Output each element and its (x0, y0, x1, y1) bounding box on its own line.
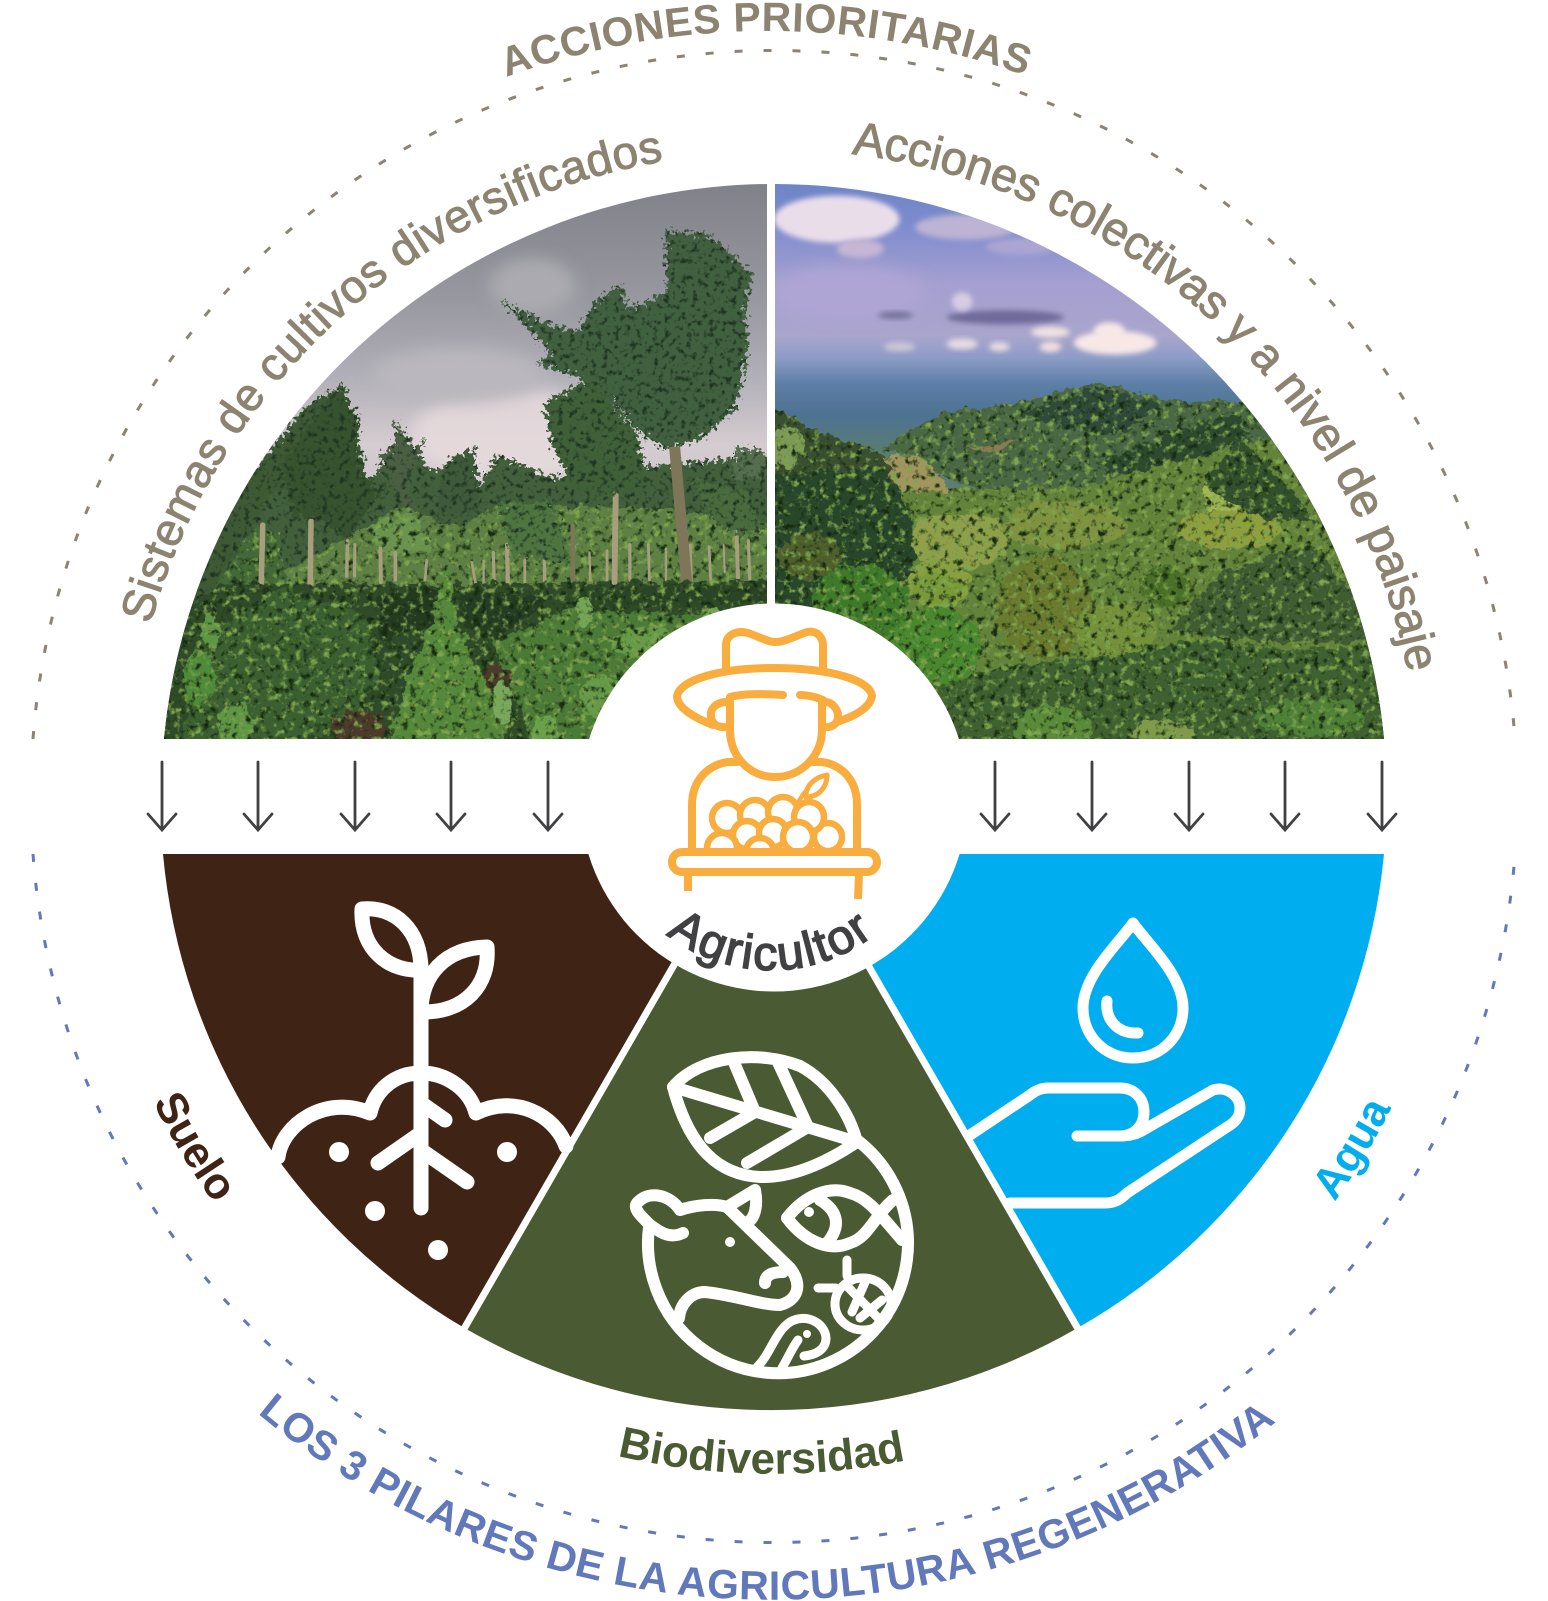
pillar sector: biodiversity (464, 797, 1078, 1410)
arrows: from actions to pillars (right) (981, 762, 1396, 830)
label: Agua: Agua (1316, 1102, 1392, 1202)
label: Biodiversidad: Biodiversidad (620, 1427, 904, 1474)
pillar sector: soil (163, 797, 771, 1328)
icon: farmer with fruit (672, 632, 877, 899)
icon: water drop over hand (970, 923, 1240, 1203)
label: Acciones colectivas y a nivel de paisaje: Acciones colectivas y a nivel de paisaje (851, 123, 1436, 670)
label: Suelo: Suelo (156, 1093, 230, 1199)
dashed ring: regenerative pillars (33, 854, 1515, 1543)
icon: seedling in soil (278, 909, 566, 1260)
centre circle (580, 604, 968, 992)
dashed ring: prioritary actions (33, 50, 1515, 739)
label: Agricultor: Agricultor (664, 913, 868, 972)
arrows: from actions to pillars (left) (148, 762, 562, 830)
photo: collective landscape-level actions (775, 184, 1384, 739)
pillar sector: water (771, 797, 1384, 1328)
photo: diversified crop system (164, 184, 767, 739)
icon: biodiversity globe with leaf, cow, fish, beetle and worm (636, 1057, 908, 1373)
label: Sistemas de cultivos diversificados: Sistemas de cultivos diversificados (122, 138, 662, 621)
